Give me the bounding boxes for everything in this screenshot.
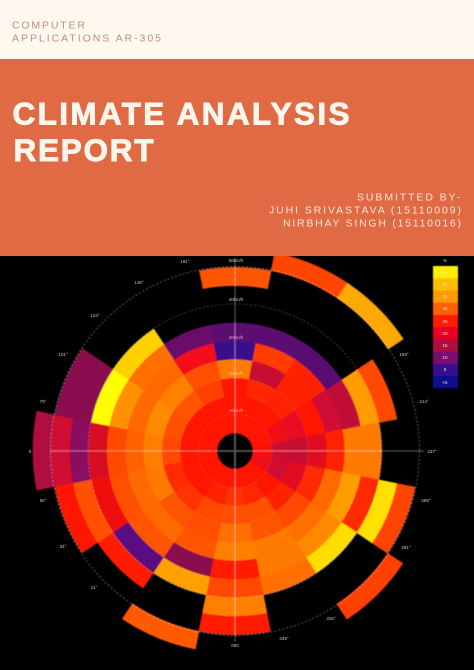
direction tick labels: 326°	[326, 616, 336, 621]
sector ESE	[60, 276, 410, 626]
radial scale labels: 10km/h	[229, 408, 244, 413]
sector WSW	[60, 276, 410, 626]
course label	[12, 20, 161, 44]
sector N	[60, 276, 410, 626]
course label: APPLICATIONS AR-305	[12, 32, 161, 44]
direction tick labels: 34°	[60, 544, 67, 549]
sector ENE	[79, 295, 391, 607]
legend labels: 45	[442, 270, 448, 275]
legend labels	[442, 258, 448, 385]
radial scale labels: 40km/h	[229, 297, 244, 302]
direction tick labels: 146°	[134, 280, 144, 285]
grid circles and axes	[50, 258, 424, 642]
sector WNW	[60, 276, 410, 626]
sector S	[60, 276, 410, 626]
sector E	[98, 314, 372, 588]
legend labels: 30	[442, 306, 448, 311]
sector SW	[79, 295, 391, 607]
direction tick labels: 169°	[399, 352, 409, 357]
submitted by credits: NIRBHAY SINGH (15110016)	[283, 218, 461, 230]
direction tick labels: 237°	[427, 449, 437, 454]
legend labels: 25	[442, 319, 448, 324]
sector NW	[98, 314, 372, 588]
legend labels: <5	[442, 380, 448, 385]
direction tick labels: 214°	[419, 399, 429, 404]
direction tick labels: 56°	[40, 498, 47, 503]
top cream band	[0, 0, 474, 59]
legend labels: 20	[442, 331, 448, 336]
direction tick labels: 0	[29, 449, 32, 454]
direction tick labels: 79°	[40, 399, 47, 404]
sector SSE	[98, 314, 372, 588]
direction tick labels: 000	[231, 643, 239, 648]
legend labels: 5	[444, 367, 447, 372]
radial scale labels: 50km/h	[229, 258, 244, 263]
sector NNW	[116, 332, 354, 570]
polar wind rose chart	[42, 258, 458, 644]
legend labels: 10	[442, 355, 448, 360]
course label: COMPUTER	[12, 20, 85, 32]
direction tick labels: 11°	[91, 585, 97, 590]
legend labels: 40	[442, 282, 448, 287]
legend labels: 35	[442, 294, 448, 299]
legend colour scale	[433, 266, 458, 388]
title: CLIMATE ANALYSIS	[12, 96, 350, 132]
radial scale labels: 20km/h	[229, 371, 244, 376]
radial scale labels: 30km/h	[229, 335, 244, 340]
direction tick labels: 124°	[90, 313, 100, 318]
direction tick labels	[29, 259, 437, 648]
sector SSW	[42, 258, 428, 644]
submitted by credits: SUBMITTED BY-	[357, 192, 460, 204]
sector SE	[42, 258, 428, 644]
legend labels: %	[443, 258, 447, 263]
title	[12, 96, 350, 168]
chart panel background	[0, 256, 474, 670]
submitted by credits: JUHI SRIVASTAVA (15110009)	[269, 204, 461, 216]
direction tick labels: 191°	[180, 259, 190, 264]
direction tick labels: 259°	[421, 498, 431, 503]
legend labels: 15	[442, 343, 448, 348]
direction tick labels: 281°	[401, 545, 411, 550]
sector NNE	[42, 258, 428, 644]
sector NE	[42, 258, 428, 644]
direction tick labels: 349°	[279, 636, 289, 641]
radial scale labels	[229, 258, 244, 413]
title: REPORT	[14, 132, 154, 168]
orange title panel	[0, 59, 474, 256]
chart underlay disc	[143, 359, 327, 543]
direction tick labels: 101°	[58, 352, 68, 357]
centre hole	[217, 433, 253, 469]
submitted by credits	[269, 192, 461, 230]
sector W	[42, 258, 428, 644]
